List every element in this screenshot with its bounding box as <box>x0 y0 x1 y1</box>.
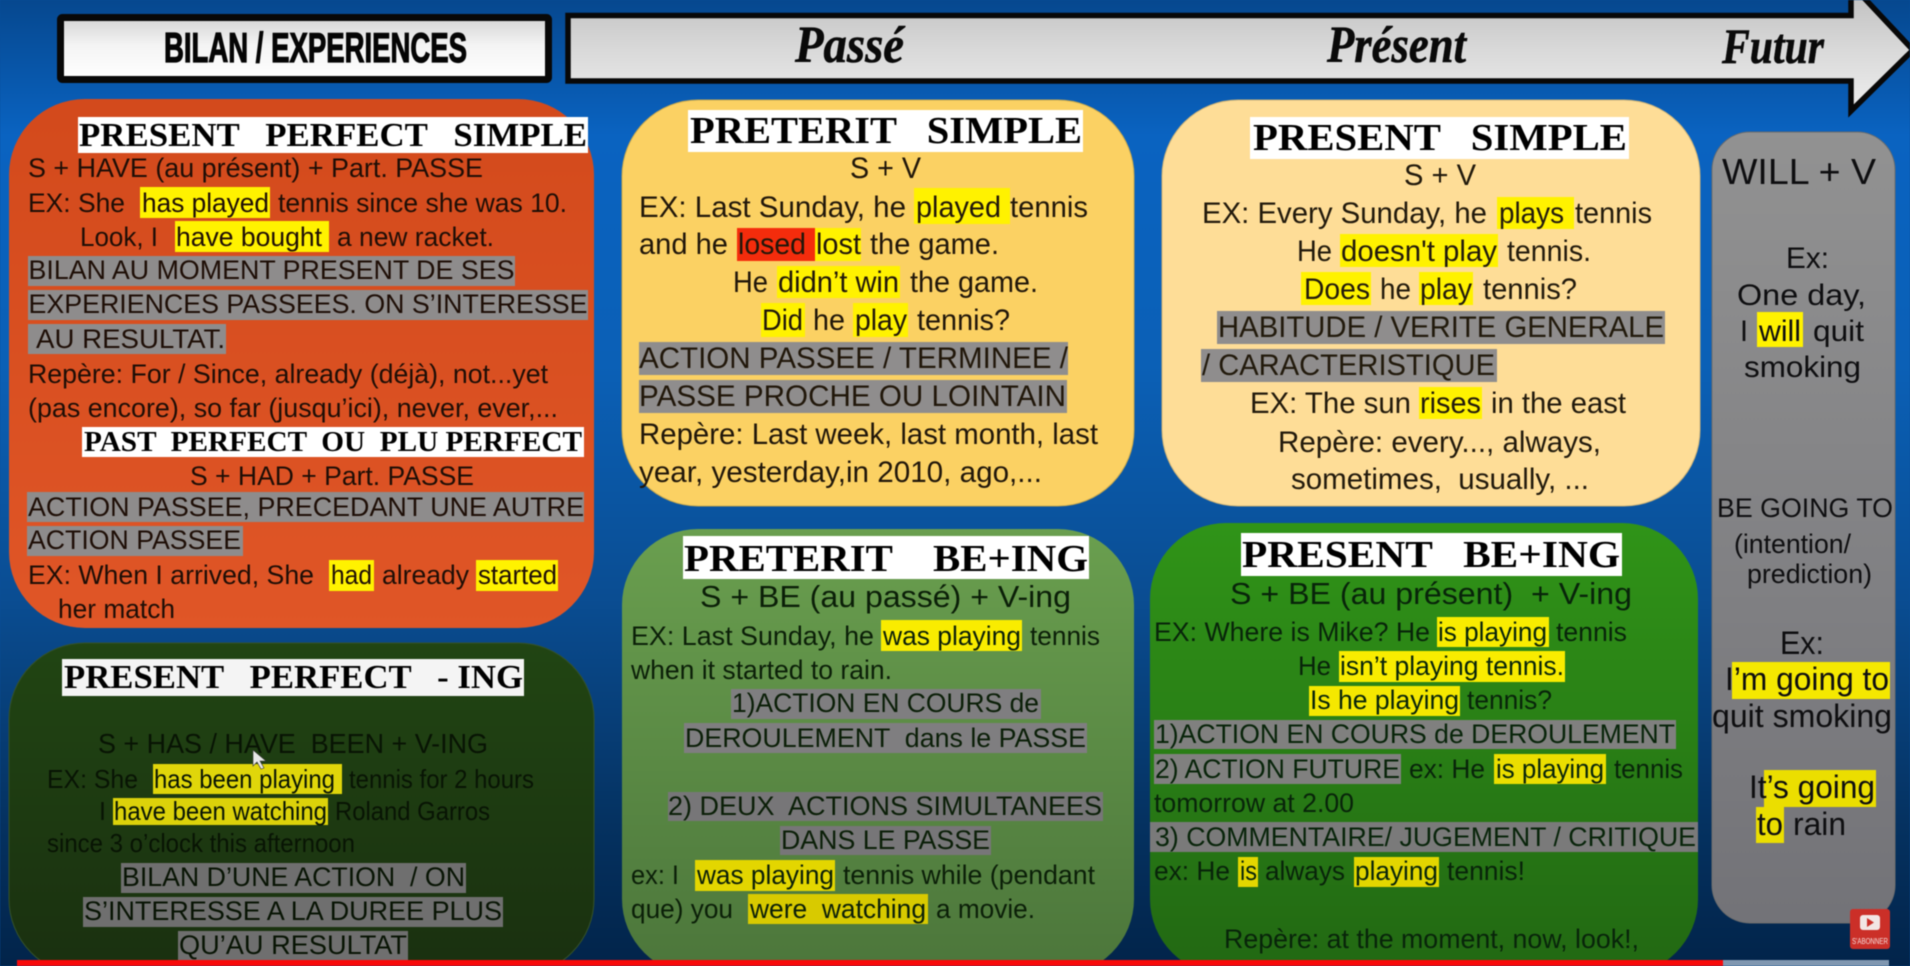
examples: he <box>813 304 845 337</box>
timeline arrow: Futur <box>1721 18 1824 74</box>
subscribe button: S'ABONNER <box>1852 937 1888 946</box>
examples: tennis? <box>1467 685 1552 715</box>
usage note <box>83 862 503 961</box>
examples: a new racket. <box>337 222 494 252</box>
example: tennis <box>1030 621 1100 651</box>
example: when it started to rain. <box>630 655 892 685</box>
past perfect example <box>28 560 558 624</box>
examples: Is he playing <box>1310 685 1459 715</box>
usage 1 <box>684 688 1087 753</box>
markers: Repère: For / Since, already (déjà), not...yet <box>28 359 548 389</box>
examples: losed <box>738 228 806 261</box>
example: always: playing <box>1355 856 1438 886</box>
example <box>630 620 1100 685</box>
panel: preterit be+ing <box>622 529 1134 966</box>
general truth example: in the east <box>1491 387 1627 420</box>
usage note <box>28 255 588 354</box>
be going to examples: to <box>1757 806 1783 842</box>
timeline arrow: Passé <box>794 17 906 74</box>
examples: play <box>1420 273 1472 306</box>
examples <box>639 188 1088 337</box>
heading: past perfect: PAST PERFECT OU PLU PERFECT <box>84 427 582 458</box>
examples: Look, I <box>80 222 158 252</box>
panel: present perfect -ing <box>9 643 594 966</box>
usage note: PASSE PROCHE OU LOINTAIN <box>639 380 1066 413</box>
examples: tennis <box>1010 191 1088 224</box>
examples: lost <box>816 228 862 261</box>
examples: didn’t win <box>778 266 899 299</box>
examples: Did <box>762 304 803 337</box>
past perfect usage note <box>27 492 584 556</box>
heading: present simple: PRESENT SIMPLE <box>1253 117 1627 159</box>
markers: year, yesterday,in 2010, ago,... <box>639 456 1042 489</box>
examples: EX: Every Sunday, he <box>1202 197 1487 230</box>
subscribe button <box>1850 909 1890 949</box>
formula: S + BE (au présent) + V-ing <box>1230 576 1632 611</box>
markers <box>1278 426 1601 496</box>
usages: ex: He <box>1409 754 1485 784</box>
markers: Repère: Last week, last month, last <box>639 418 1099 451</box>
examples: have bought <box>176 222 322 252</box>
be going to examples: quit smoking <box>1712 698 1892 734</box>
examples: tennis <box>1575 197 1652 230</box>
past perfect example: already <box>382 560 469 590</box>
usage note <box>639 342 1069 413</box>
usages: 1)ACTION EN COURS de DEROULEMENT <box>1155 719 1675 749</box>
usage note: HABITUDE / VERITE GENERALE <box>1218 311 1664 344</box>
examples: tennis since she was 10. <box>278 188 567 218</box>
will example: smoking <box>1744 351 1861 384</box>
past perfect example: her match <box>58 594 175 624</box>
examples: is playing <box>1438 617 1547 647</box>
heading: preterit be+ing: PRETERIT BE+ING <box>684 538 1088 580</box>
examples: play <box>855 304 907 337</box>
formula: S + HAS / HAVE BEEN + V-ING <box>98 728 488 759</box>
general truth example: rises <box>1420 387 1481 420</box>
past perfect example: started <box>478 560 557 590</box>
icon: mouse cursor <box>253 750 266 769</box>
markers <box>28 359 558 423</box>
will example: I <box>1740 315 1748 348</box>
example: always: is <box>1240 856 1257 886</box>
usage 1: DEROULEMENT dans le PASSE <box>685 723 1086 753</box>
heading: be going to: BE GOING TO <box>1717 493 1893 523</box>
be going to examples <box>1712 625 1892 843</box>
examples <box>47 764 534 858</box>
examples: He <box>1298 651 1331 681</box>
example 2: que) you <box>631 894 733 924</box>
be going to examples: I’m going to <box>1725 661 1889 697</box>
examples: the game. <box>870 228 999 261</box>
examples: has been playing <box>154 764 335 794</box>
be going to examples: It’s going <box>1749 769 1875 805</box>
examples: Does <box>1304 273 1370 306</box>
past perfect usage note: ACTION PASSEE, PRECEDANT UNE AUTRE <box>28 492 584 522</box>
markers <box>639 418 1099 489</box>
usage note: BILAN D’UNE ACTION / ON <box>122 862 465 892</box>
examples: EX: She <box>28 188 125 218</box>
example: EX: Last Sunday, he <box>631 621 874 651</box>
examples: EX: Where is Mike? He <box>1154 617 1430 647</box>
examples: Roland Garros <box>335 796 490 826</box>
examples: the game. <box>910 266 1038 299</box>
example: always: always <box>1265 856 1345 886</box>
examples: He <box>1297 235 1332 268</box>
heading: present perfect simple: PRESENT PERFECT SIMPLE <box>79 117 587 154</box>
heading: be going to: (intention/ <box>1734 529 1851 559</box>
example 2 <box>631 860 1095 924</box>
examples: tennis? <box>1483 273 1577 306</box>
markers: Repère: every..., always, <box>1278 426 1601 459</box>
usages: tomorrow at 2.00 <box>1154 788 1354 818</box>
examples: have been watching <box>114 796 327 826</box>
examples: played <box>916 191 1001 224</box>
markers: Repère: at the moment, now, look!, <box>1224 924 1639 954</box>
heading: present be+ing: PRESENT BE+ING <box>1242 534 1620 576</box>
past perfect example: EX: When I arrived, She <box>28 560 314 590</box>
example: was playing <box>882 621 1021 651</box>
will example <box>1737 242 1866 384</box>
example 2: was playing <box>696 860 834 890</box>
examples: EX: She <box>47 764 138 794</box>
timeline arrow: Présent <box>1326 17 1467 74</box>
heading: will + v: WILL + V <box>1722 151 1876 192</box>
usage note: ACTION PASSEE / TERMINEE / <box>639 342 1069 375</box>
examples: tennis. <box>1507 235 1591 268</box>
example 2: ex: I <box>631 860 679 890</box>
usage note <box>1201 311 1665 382</box>
heading: be going to: prediction) <box>1747 559 1872 589</box>
usages <box>1150 719 1698 852</box>
usage 1: 1)ACTION EN COURS de <box>732 688 1039 718</box>
usage 2 <box>668 791 1103 855</box>
examples: EX: Last Sunday, he <box>639 191 906 224</box>
example 2: tennis while (pendant <box>843 860 1095 890</box>
usage note: QU’AU RESULTAT <box>179 930 407 960</box>
example: always: tennis! <box>1447 856 1525 886</box>
be going to examples: rain <box>1793 806 1846 842</box>
examples: He <box>733 266 768 299</box>
formula: S + BE (au passé) + V-ing <box>700 579 1071 614</box>
markers: (pas encore), so far (jusqu’ici), never, ever,... <box>28 393 558 423</box>
will example: quit <box>1813 315 1865 348</box>
formula: S + HAVE (au présent) + Part. PASSE <box>28 153 483 183</box>
examples: tennis <box>1556 617 1627 647</box>
past perfect usage note: ACTION PASSEE <box>28 525 241 555</box>
heading: be going to <box>1717 493 1893 589</box>
examples: has played <box>142 188 269 218</box>
examples: plays <box>1499 197 1564 230</box>
usages: is playing <box>1496 754 1604 784</box>
examples: isn’t playing tennis. <box>1340 651 1564 681</box>
examples <box>1154 617 1627 716</box>
general truth example <box>1250 387 1627 420</box>
will example: One day, <box>1737 279 1866 312</box>
usages: tennis <box>1614 754 1683 784</box>
markers: sometimes, usually, ... <box>1291 463 1589 496</box>
examples <box>1202 197 1652 306</box>
usage note: / CARACTERISTIQUE <box>1202 349 1495 382</box>
examples: doesn't play <box>1341 235 1497 268</box>
usage note: AU RESULTAT. <box>36 324 225 354</box>
will example: Ex: <box>1786 242 1829 275</box>
panel: preterit simple <box>622 100 1134 506</box>
examples: he <box>1380 273 1411 306</box>
usages: 2) ACTION FUTURE <box>1155 754 1400 784</box>
timeline arrow <box>568 0 1910 111</box>
be going to examples: Ex: <box>1780 625 1824 661</box>
examples: tennis? <box>917 304 1010 337</box>
examples: and he <box>639 228 728 261</box>
usage note: S’INTERESSE A LA DUREE PLUS <box>84 896 502 926</box>
example 2: were watching <box>749 894 926 924</box>
general truth example: EX: The sun <box>1250 387 1411 420</box>
examples: since 3 o’clock this afternoon <box>47 828 355 858</box>
title box: Bilan / Experiences <box>60 18 548 80</box>
past perfect formula: S + HAD + Part. PASSE <box>190 461 474 491</box>
panel: present perfect simple <box>9 99 594 628</box>
example: always: ex: He <box>1154 856 1230 886</box>
panel: future <box>1712 132 1895 923</box>
panel: present be+ing <box>1150 523 1698 966</box>
usages: 3) COMMENTAIRE/ JUGEMENT / CRITIQUE <box>1155 822 1696 852</box>
examples: I <box>99 796 106 826</box>
will example: will <box>1758 315 1801 348</box>
examples: tennis for 2 hours <box>349 764 534 794</box>
heading: preterit simple: PRETERIT SIMPLE <box>690 110 1082 152</box>
usage note: BILAN AU MOMENT PRESENT DE SES <box>28 255 514 285</box>
past perfect example: had <box>331 560 372 590</box>
usage 2: DANS LE PASSE <box>781 825 990 855</box>
video progress bar <box>17 960 1889 966</box>
panel: present simple <box>1162 100 1700 506</box>
formula: S + V <box>1404 159 1476 192</box>
usage note: EXPERIENCES PASSEES. ON S’INTERESSE <box>28 289 588 319</box>
title box: Bilan / Experiences: BILAN / EXPERIENCES <box>164 24 467 71</box>
heading: present perfect -ing: PRESENT PERFECT - ING <box>64 659 523 696</box>
example 2: a movie. <box>936 894 1035 924</box>
usage 2: 2) DEUX ACTIONS SIMULTANEES <box>668 791 1102 821</box>
examples <box>28 187 567 252</box>
example: always <box>1154 856 1525 887</box>
formula: S + V <box>850 152 921 185</box>
